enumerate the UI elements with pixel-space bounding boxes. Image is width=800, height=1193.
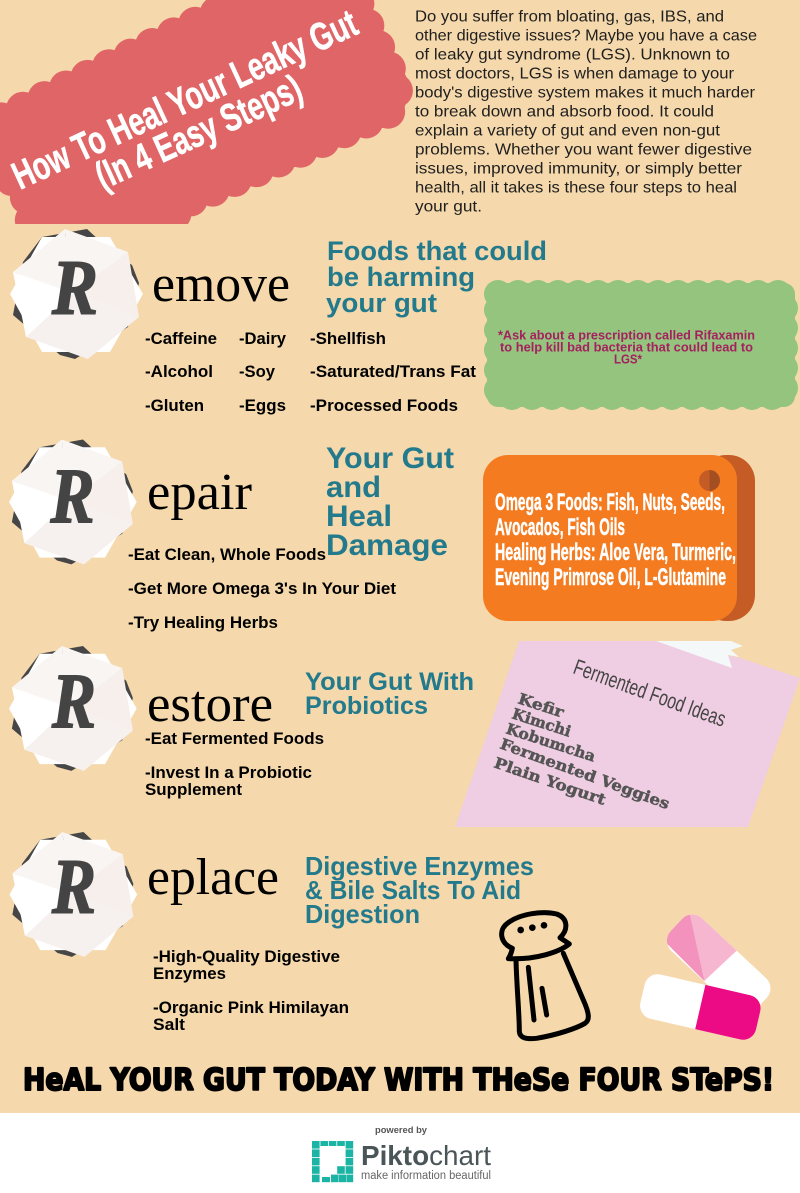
intro text: health, all it takes is these four steps to heal — [415, 180, 737, 197]
list: foods to remove — [145, 329, 476, 415]
intro text: issues, improved immunity, or simply better — [415, 160, 743, 178]
heading: Remove: be harming — [327, 262, 475, 292]
heading: Restore — [305, 668, 474, 720]
heading: Replace: & Bile Salts To Aid — [305, 875, 521, 905]
list: restore steps: Supplement — [145, 780, 242, 799]
heading: Restore: Your Gut With — [305, 668, 474, 696]
footer — [0, 1113, 800, 1193]
list: restore steps: -Eat Fermented Foods — [145, 729, 324, 748]
icon: salt shaker — [502, 913, 588, 1039]
intro text: explain a variety of gut and even non-gut — [415, 122, 721, 140]
step title: Repair: epair — [147, 464, 252, 521]
heading: Repair: Damage — [326, 529, 448, 562]
list: foods to remove: -Eggs — [239, 396, 286, 415]
heading: Repair: and — [326, 471, 381, 504]
list: repair steps — [128, 545, 396, 632]
footer: powered by — [375, 1125, 428, 1136]
badge: Repair: R — [50, 453, 94, 540]
tag: omega 3 foods and herbs: Avocados, Fish Oils — [495, 514, 625, 541]
heading: Remove: Foods that could — [327, 236, 547, 266]
heading: Repair: Your Gut — [326, 442, 454, 475]
heading: Remove — [326, 236, 547, 318]
intro text: your gut. — [415, 199, 482, 216]
intro text: most doctors, LGS is when damage to your — [415, 66, 735, 82]
badge: Remove: R — [51, 244, 98, 331]
callout: Rifaxamin: LGS* — [614, 352, 642, 366]
list: replace steps — [153, 947, 349, 1034]
list: foods to remove: -Caffeine — [145, 329, 217, 348]
intro text: Do you suffer from bloating, gas, IBS, and — [415, 9, 724, 26]
badge: Repair — [9, 440, 137, 564]
list: replace steps: -High-Quality Digestive — [153, 947, 340, 966]
list: replace steps: Enzymes — [153, 964, 226, 983]
intro text: of leaky gut syndrome (LGS). Unknown to — [415, 46, 730, 64]
icon: capsules — [640, 914, 770, 1040]
list: replace steps: Salt — [153, 1015, 185, 1034]
heading: Replace: Digestive Enzymes — [305, 851, 534, 881]
list: repair steps: -Get More Omega 3's In Your Diet — [128, 579, 396, 598]
callout: Rifaxamin — [498, 294, 784, 396]
footer: make information beautiful — [361, 1170, 491, 1182]
list: foods to remove: -Alcohol — [145, 362, 213, 381]
title: (In 4 Easy Steps) — [89, 67, 309, 198]
callout: Rifaxamin: to help kill bad bacteria that could lead to — [500, 340, 753, 354]
heading: Restore: Probiotics — [305, 692, 428, 720]
badge: Restore: R — [51, 658, 96, 745]
intro text — [415, 9, 757, 216]
intro text: body's digestive system makes it much harder — [415, 84, 756, 102]
heading: Replace — [305, 851, 534, 929]
heading: Repair: Heal — [326, 500, 392, 533]
intro text: problems. Whether you want fewer digestive — [415, 142, 752, 158]
tag: omega 3 foods and herbs — [483, 455, 755, 621]
intro text: to break down and absorb food. It could — [415, 104, 714, 120]
list: repair steps: -Eat Clean, Whole Foods — [128, 545, 326, 564]
note: fermented food ideas: Fermented Veggies — [498, 735, 672, 813]
note: fermented food ideas: Kobumcha — [504, 720, 598, 766]
list: foods to remove: -Processed Foods — [310, 396, 458, 415]
badge: Restore — [9, 646, 137, 771]
list: repair steps: -Try Healing Herbs — [128, 613, 278, 632]
list: replace steps: -Organic Pink Himilayan — [153, 998, 349, 1017]
badge: Replace: R — [51, 843, 96, 930]
list: restore steps: -Invest In a Probiotic — [145, 763, 312, 782]
title banner — [0, 0, 397, 245]
step title: Restore: estore — [147, 676, 273, 733]
list: foods to remove: -Saturated/Trans Fat — [310, 362, 476, 381]
note: fermented food ideas: Kefir — [516, 690, 567, 722]
step title: Remove: emove — [152, 256, 290, 313]
heading: Remove: your gut — [326, 288, 437, 318]
note: fermented food ideas — [455, 641, 800, 827]
badge: Replace — [10, 832, 137, 957]
intro text: other digestive issues? Maybe you have a case — [415, 28, 757, 45]
list: foods to remove: -Shellfish — [310, 329, 386, 348]
list: foods to remove: -Dairy — [239, 329, 287, 348]
list: foods to remove: -Soy — [239, 362, 276, 381]
list: foods to remove: -Gluten — [145, 396, 204, 415]
heading: Repair — [326, 442, 454, 562]
callout: Rifaxamin: *Ask about a prescription called Rifaxamin — [498, 328, 755, 342]
step title: Replace: eplace — [147, 849, 279, 906]
badge: Remove — [10, 229, 143, 359]
footer: Piktochart — [361, 1140, 491, 1171]
note: fermented food ideas: Kimchi — [510, 705, 574, 741]
note: fermented food ideas: Plain Yogurt — [492, 754, 608, 809]
heading: Replace: Digestion — [305, 899, 420, 929]
note: fermented food ideas: Fermented Food Ideas — [570, 654, 729, 732]
list: restore steps — [145, 729, 324, 799]
